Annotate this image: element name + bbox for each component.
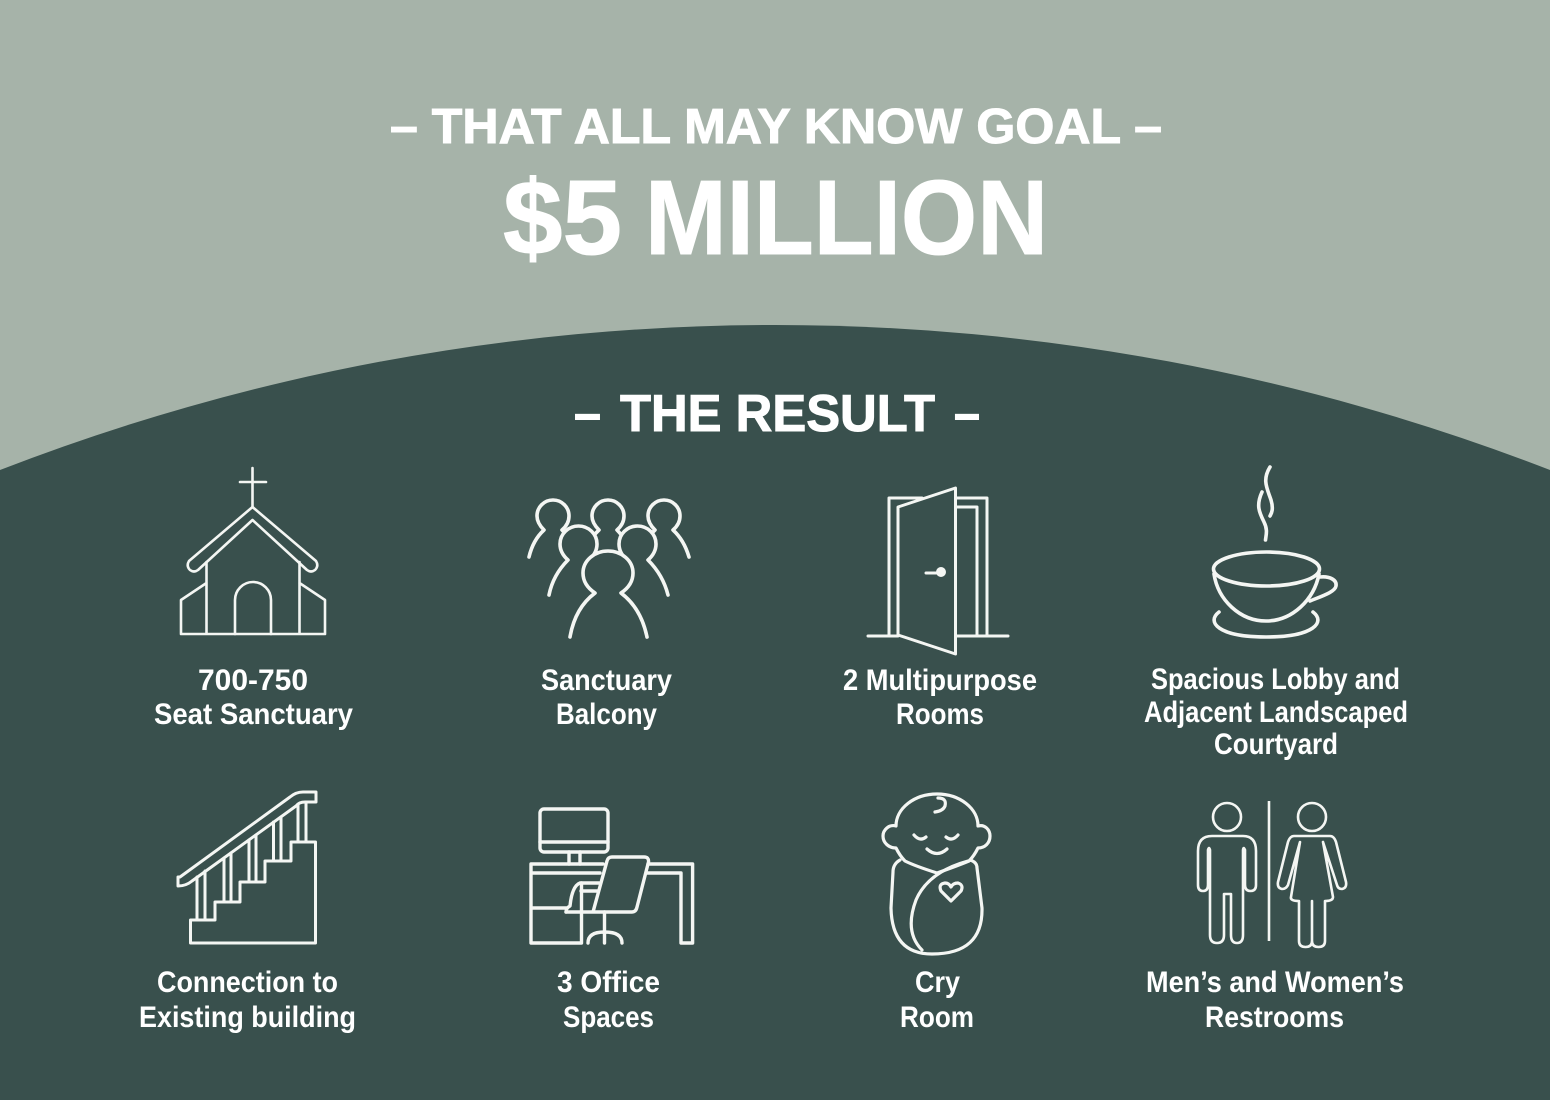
label: 3 office spaces: Spaces — [563, 1001, 654, 1034]
item: office spaces — [531, 809, 693, 1034]
label: sanctuary balcony — [541, 664, 672, 731]
label: connection to existing building: Connection to — [157, 966, 338, 999]
icon: swaddled baby — [883, 794, 990, 954]
icon: office desk and chair — [531, 809, 693, 943]
label: 3 office spaces: 3 Office — [557, 966, 660, 999]
label: spacious lobby and courtyard: Spacious Lobby and — [1151, 663, 1400, 696]
heading: goal amount — [503, 159, 1048, 277]
label: sanctuary balcony: Balcony — [556, 698, 657, 731]
label: 700-750 seat sanctuary — [154, 664, 353, 731]
label: sanctuary balcony: Sanctuary — [541, 664, 672, 697]
heading: the result: THE RESULT — [620, 385, 935, 443]
icon: open door — [868, 488, 1008, 654]
heading: goal amount: MILLION — [645, 159, 1048, 277]
label: 2 multipurpose rooms: 2 Multipurpose — [843, 664, 1037, 697]
panel: dark green curved lower section — [0, 325, 1550, 1100]
icon: men and women restroom sign — [1198, 801, 1346, 947]
label: cry room: Cry — [915, 966, 960, 999]
label: men's and women's restrooms — [1146, 966, 1404, 1034]
heading: goal amount: $5 — [503, 159, 622, 277]
label: cry room — [900, 966, 974, 1034]
item: sanctuary seating — [154, 468, 353, 731]
label: spacious lobby and courtyard — [1144, 663, 1408, 761]
item: restrooms — [1146, 801, 1404, 1034]
icon: group of people — [529, 500, 689, 637]
heading: the result: – — [574, 385, 601, 443]
label: 700-750 seat sanctuary: Seat Sanctuary — [154, 698, 353, 731]
item: sanctuary balcony — [529, 500, 689, 731]
label: 700-750 seat sanctuary: 700-750 — [198, 664, 308, 697]
label: 3 office spaces — [557, 966, 660, 1034]
item: cry room — [883, 794, 990, 1034]
label: connection to existing building: Existing building — [139, 1001, 356, 1034]
label: men's and women's restrooms: Restrooms — [1205, 1001, 1344, 1034]
item: multipurpose rooms — [843, 488, 1037, 731]
label: spacious lobby and courtyard: Adjacent Landscaped — [1144, 696, 1408, 729]
item: lobby and courtyard — [1144, 467, 1408, 761]
heading: goal title: – THAT ALL MAY KNOW GOAL – — [390, 100, 1162, 154]
icon: steaming coffee cup — [1214, 467, 1336, 637]
label: 2 multipurpose rooms: Rooms — [896, 698, 984, 731]
label: connection to existing building — [139, 966, 356, 1034]
icon: staircase — [178, 792, 316, 943]
label: spacious lobby and courtyard: Courtyard — [1214, 728, 1338, 761]
label: 2 multipurpose rooms — [843, 664, 1037, 731]
heading: the result: – — [954, 385, 980, 443]
item: connection to existing building — [139, 792, 356, 1034]
label: cry room: Room — [900, 1001, 974, 1034]
label: men's and women's restrooms: Men’s and Women’s — [1146, 966, 1404, 999]
icon: church — [181, 468, 325, 634]
